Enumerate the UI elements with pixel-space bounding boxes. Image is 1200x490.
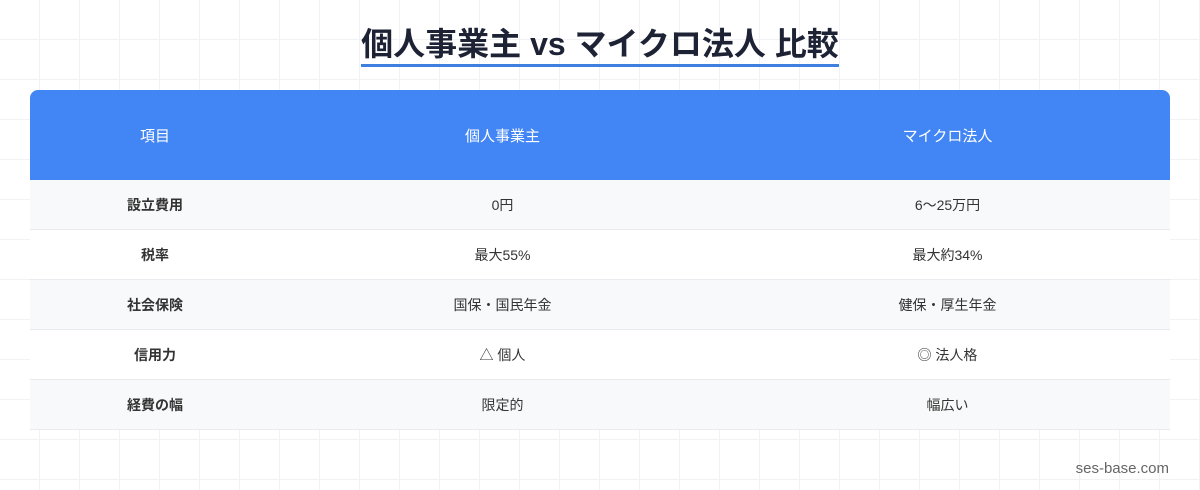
row: social insurance: 国保・国民年金 [454, 296, 552, 312]
row: expense range: 限定的 [482, 396, 524, 412]
row: expense range: 経費の幅 [127, 396, 183, 412]
row: setup cost: 0円 [492, 196, 513, 212]
header row: マイクロ法人 [903, 128, 992, 144]
row: credit: 信用力 [134, 346, 176, 362]
title: 個人事業主 vs マイクロ法人 比較 [361, 26, 839, 62]
row: tax rate: 最大55% [474, 246, 531, 262]
row: tax rate: 最大約34% [912, 246, 983, 262]
comparison table [30, 90, 1170, 430]
row: setup cost [30, 180, 1170, 230]
row: social insurance [30, 280, 1170, 330]
footer source: ses-base.com [1076, 460, 1169, 477]
row: credit: ◎ 法人格 [918, 346, 977, 362]
row: expense range: 幅広い [926, 396, 968, 412]
row: tax rate [30, 230, 1170, 280]
row: expense range [30, 380, 1170, 430]
row: setup cost: 設立費用 [127, 196, 183, 212]
header row: 項目 [140, 128, 170, 144]
header row: 個人事業主 [465, 128, 540, 144]
row: tax rate: 税率 [141, 246, 169, 262]
row: credit: △ 個人 [480, 346, 525, 362]
row: credit [30, 330, 1170, 380]
header row [30, 90, 1170, 180]
row: social insurance: 健保・厚生年金 [898, 296, 996, 312]
row: social insurance: 社会保険 [127, 296, 183, 312]
row: setup cost: 6〜25万円 [915, 196, 980, 212]
